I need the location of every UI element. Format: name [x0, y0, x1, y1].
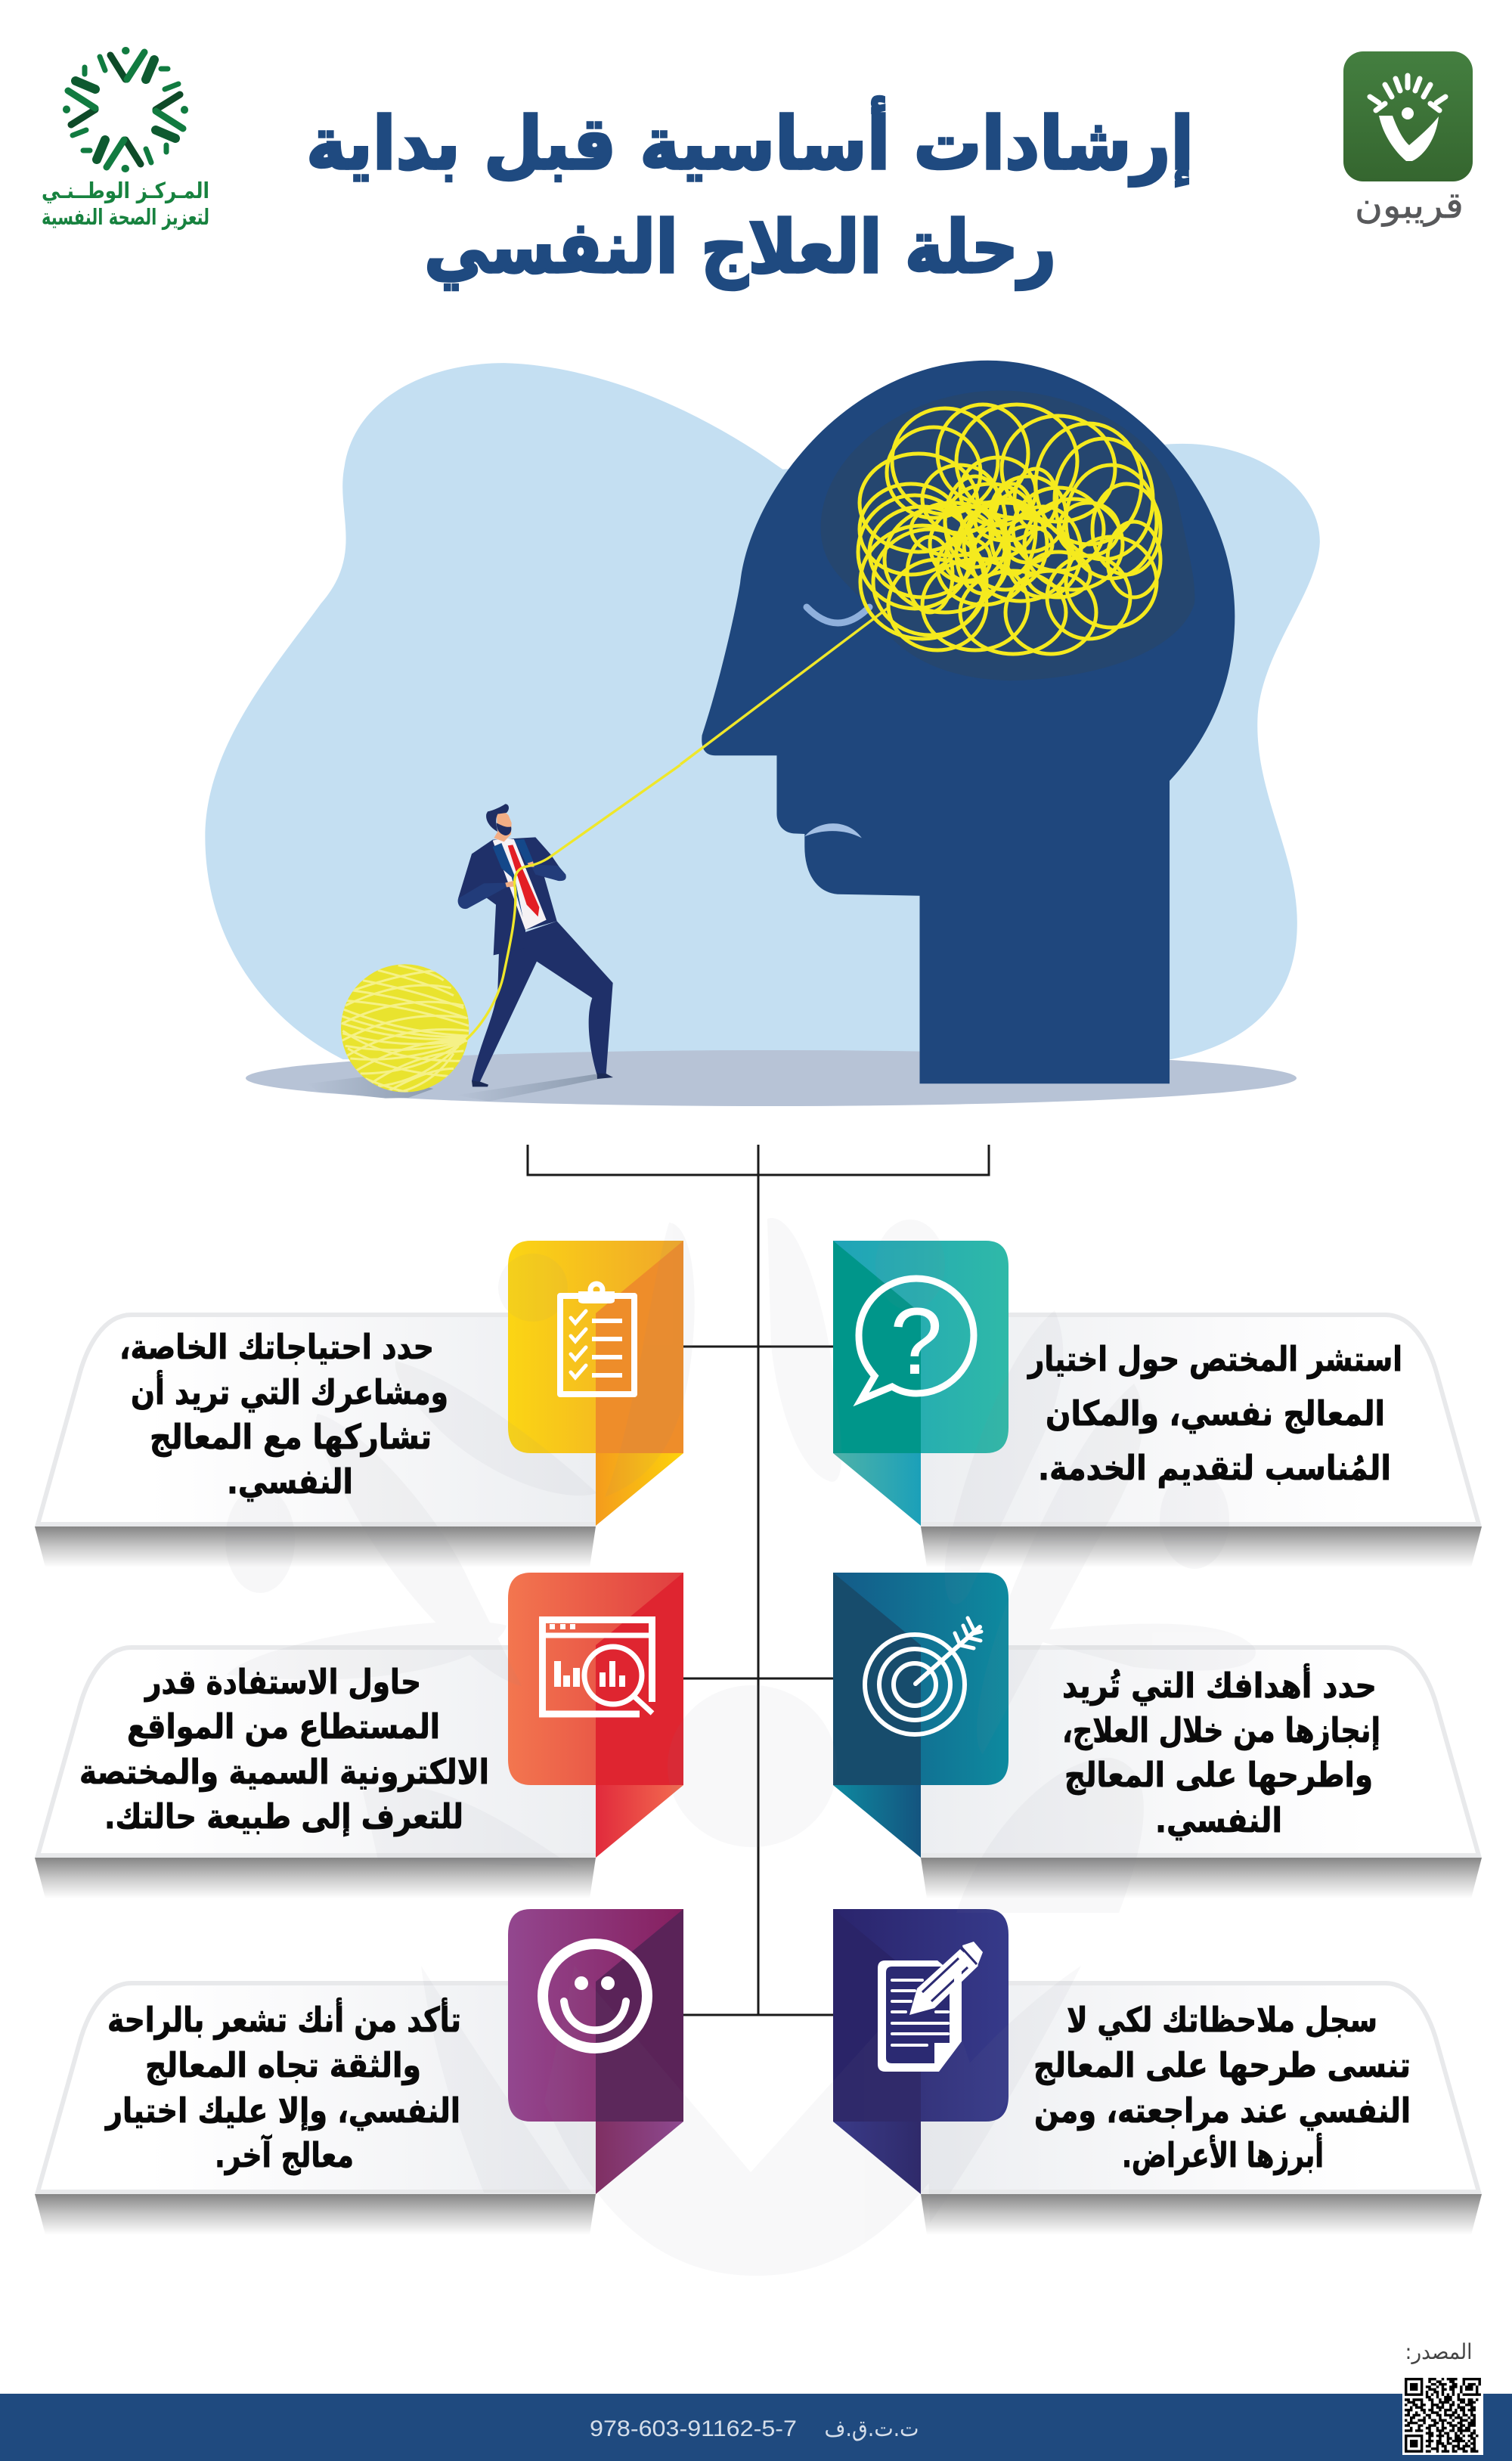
- panel: feel comfortable: [35, 1982, 596, 2235]
- text: feel comfortable: والثقة تجاه المعالج: [145, 2045, 421, 2085]
- text: define your needs: حدد احتياجاتك الخاصة،: [119, 1327, 434, 1367]
- shoes: [472, 1073, 613, 1086]
- man pulling the thread with yarn ball: [308, 765, 680, 1102]
- text: feel comfortable: تأكد من أنك تشعر بالراحة: [107, 1998, 461, 2040]
- icon: browser window with chart and magnifier: [542, 1619, 652, 1714]
- panel: read trusted websites: [35, 1646, 596, 1898]
- icon: smiley face: [543, 1944, 647, 2048]
- isbn number: [590, 2416, 919, 2442]
- thread to ball: [466, 765, 680, 1040]
- trousers: [472, 921, 613, 1082]
- text: define your goals: إنجازها من خلال العلاج،: [1062, 1710, 1380, 1750]
- tie: [508, 845, 539, 916]
- text: define your needs: تشاركها مع المعالج: [150, 1417, 432, 1457]
- ribbon: indigo: [833, 1909, 1009, 2194]
- text: define your needs: النفسي.: [227, 1461, 353, 1502]
- text: feel comfortable: [104, 1998, 461, 2175]
- text: feel comfortable: معالج آخر.: [215, 2134, 354, 2175]
- logo: qareboon: [1343, 51, 1473, 227]
- panel: record your notes: [921, 1982, 1482, 2235]
- text: record your notes: النفسي عند مراجعته، ومن: [1034, 2091, 1411, 2131]
- title: [306, 97, 1194, 290]
- thread from brain: [680, 607, 889, 764]
- logo: national centre for mental health: لتعزيز الصحة النفسية: [42, 204, 209, 230]
- text: read trusted websites: [79, 1662, 489, 1836]
- text: define your goals: واطرحها على المعالج: [1064, 1755, 1373, 1795]
- panel: consult the specialist: [921, 1313, 1482, 1567]
- watermark logo: [225, 1218, 1256, 2276]
- text: record your notes: تنسى طرحها على المعالج: [1033, 2045, 1411, 2085]
- footer bar: [0, 2394, 1512, 2461]
- text: define your goals: النفسي.: [1155, 1800, 1282, 1840]
- shirt: [493, 838, 547, 930]
- text: read trusted websites: للتعرف إلى طبيعة حالتك.: [104, 1796, 463, 1836]
- text: define your needs: [119, 1327, 448, 1502]
- jacket: [458, 837, 565, 955]
- ribbon: teal: [833, 1241, 1009, 1526]
- neck and face: [494, 812, 512, 842]
- ribbon: blue: [833, 1573, 1009, 1858]
- text: consult the specialist: المعالج نفسي، والمكان: [1046, 1393, 1385, 1434]
- isbn number: ت.ت.ق.ف: [824, 2416, 919, 2442]
- text: read trusted websites: الالكترونية السمية والمختصة: [79, 1752, 489, 1792]
- text: define your goals: حدد أهدافك التي تُريد: [1062, 1663, 1377, 1706]
- hands: [505, 861, 534, 887]
- text: consult the specialist: المُناسب لتقديم الخدمة.: [1038, 1448, 1391, 1488]
- icon: clipboard checklist: [560, 1284, 634, 1394]
- illustration: head, tangled thoughts and man pulling thread: [205, 361, 1320, 1106]
- lapels: [493, 839, 535, 917]
- qr code: [1402, 2376, 1483, 2455]
- yarn ball: [340, 964, 469, 1093]
- head silhouette: [702, 361, 1235, 1083]
- closed eye: [807, 607, 869, 623]
- text: read trusted websites: حاول الاستفادة قدر: [144, 1662, 421, 1702]
- connector bracket and lines: [528, 1145, 989, 2015]
- logo: national centre for mental health: المـركـز الوطــنـي: [42, 178, 209, 203]
- logo: qareboon: قريبون: [1355, 184, 1464, 227]
- icon: target with arrow: [865, 1618, 981, 1734]
- logo: national centre for mental health: [42, 51, 209, 230]
- ground ellipse: [246, 1050, 1297, 1106]
- text: record your notes: [1033, 2000, 1411, 2175]
- text: record your notes: أبرزها الأعراض.: [1122, 2133, 1324, 2175]
- icon: question chat bubble: ?: [890, 1289, 943, 1394]
- text: feel comfortable: النفسي، وإلا عليك اختيار: [104, 2091, 460, 2131]
- text: consult the specialist: استشر المختص حول اختيار: [1027, 1339, 1402, 1379]
- ground shadows: [308, 1075, 433, 1099]
- panel: define your needs: [35, 1313, 596, 1567]
- beard: [497, 823, 511, 835]
- text: define your needs: ومشاعرك التي تريد أن: [131, 1370, 448, 1412]
- panel: define your goals: [921, 1646, 1482, 1898]
- source label: المصدر:: [1405, 2339, 1473, 2364]
- background blob: [205, 363, 1320, 1059]
- text: consult the specialist: [1027, 1339, 1402, 1488]
- ribbon: red: [508, 1573, 683, 1858]
- hair: [486, 804, 509, 832]
- icon: document and pencil: [878, 1942, 983, 2072]
- sleeves: [458, 864, 566, 909]
- scribble brain: [858, 404, 1160, 654]
- text: record your notes: سجل ملاحظاتك لكي لا: [1067, 2000, 1377, 2040]
- text: read trusted websites: المستطاع من المواقع: [127, 1706, 440, 1747]
- ribbon: yellow: [508, 1241, 683, 1526]
- icon: question chat bubble: [859, 1279, 974, 1399]
- ribbon: purple: [508, 1909, 683, 2194]
- title: رحلة العلاج النفسي: [424, 205, 1056, 290]
- isbn number: 978-603-91162-5-7: [590, 2416, 797, 2441]
- title: إرشادات أساسية قبل بداية: [306, 97, 1194, 187]
- text: define your goals: [1062, 1663, 1380, 1840]
